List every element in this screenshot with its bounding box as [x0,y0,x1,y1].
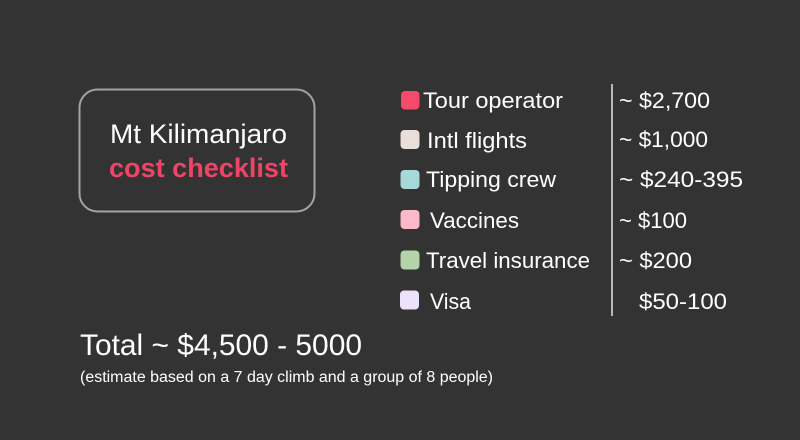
cost values: ~ $200 [619,248,692,273]
item: travel insurance: Travel insurance [426,248,590,273]
footnote: (estimate based on a 7 day climb and a group of 8 people) [80,369,493,386]
panel: title box [80,90,314,212]
item: tipping crew: Tipping crew [426,167,557,192]
item: intl flights: Intl flights [427,128,527,153]
item: visa: Visa [430,289,471,314]
total: Total ~ $4,500 - 5000 [80,329,362,362]
cost values: $50-100 [639,289,727,314]
item: vaccines: Vaccines [430,208,519,233]
cost values [619,88,743,314]
legend: cost items [400,88,590,314]
cost values: ~ $1,000 [619,127,708,152]
title line 1: Mt Kilimanjaro [110,119,287,149]
cost values: ~ $240-395 [619,167,743,192]
cost values: ~ $100 [619,208,687,233]
item: visa [400,289,471,314]
title line 2: cost checklist [109,153,288,183]
cost values: ~ $2,700 [619,88,710,113]
item: tour operator: Tour operator [423,88,564,113]
